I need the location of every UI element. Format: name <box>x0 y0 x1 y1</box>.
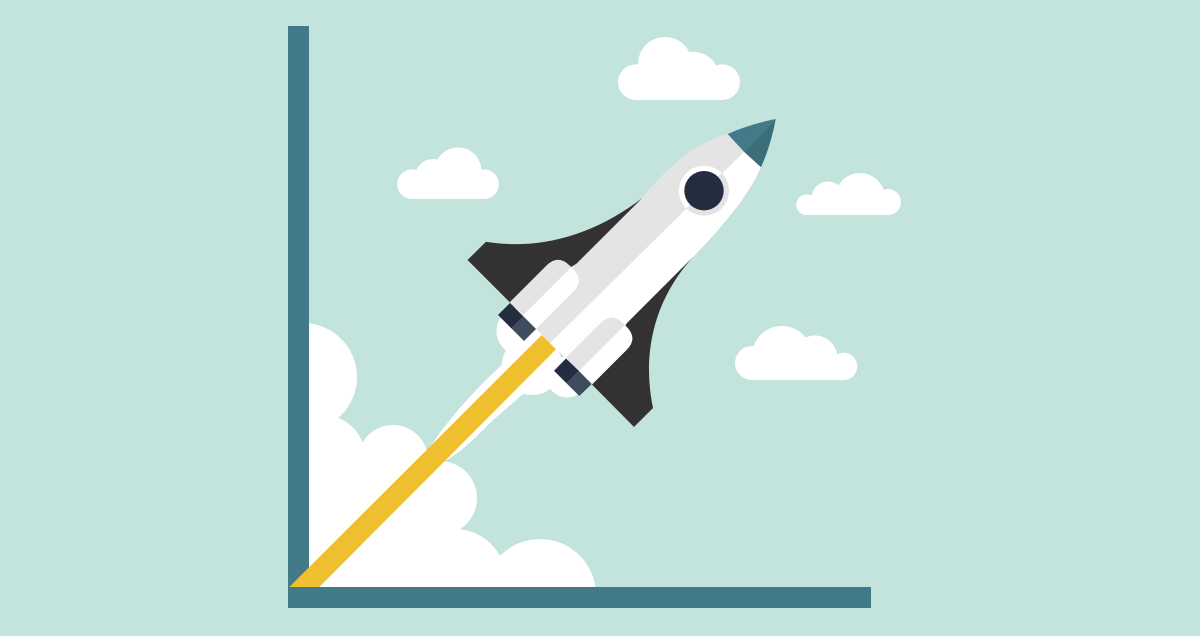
engine smoke puffs <box>496 306 588 398</box>
axis: vertical <box>288 26 309 608</box>
cloud: top <box>618 37 740 104</box>
cloud: lower right <box>735 326 857 386</box>
cloud: left <box>397 148 499 199</box>
axis: horizontal <box>288 587 871 608</box>
rising yellow trend line <box>289 335 556 587</box>
smoke cloud at launch base <box>309 323 596 587</box>
rocket body: white side <box>550 152 761 371</box>
wing: lower <box>592 257 693 427</box>
window <box>679 166 729 216</box>
wing: upper <box>468 198 642 302</box>
cloud: right <box>796 173 901 215</box>
nozzle: upper <box>498 303 536 341</box>
illustration: rocket launch growth chart <box>288 26 901 608</box>
booster: lower <box>566 312 638 384</box>
rocket body: grey side <box>524 134 744 343</box>
rocket <box>468 119 776 427</box>
nose cone <box>728 119 776 167</box>
exhaust flare <box>430 351 560 460</box>
nozzle: lower <box>554 358 592 396</box>
booster: upper <box>510 254 585 329</box>
